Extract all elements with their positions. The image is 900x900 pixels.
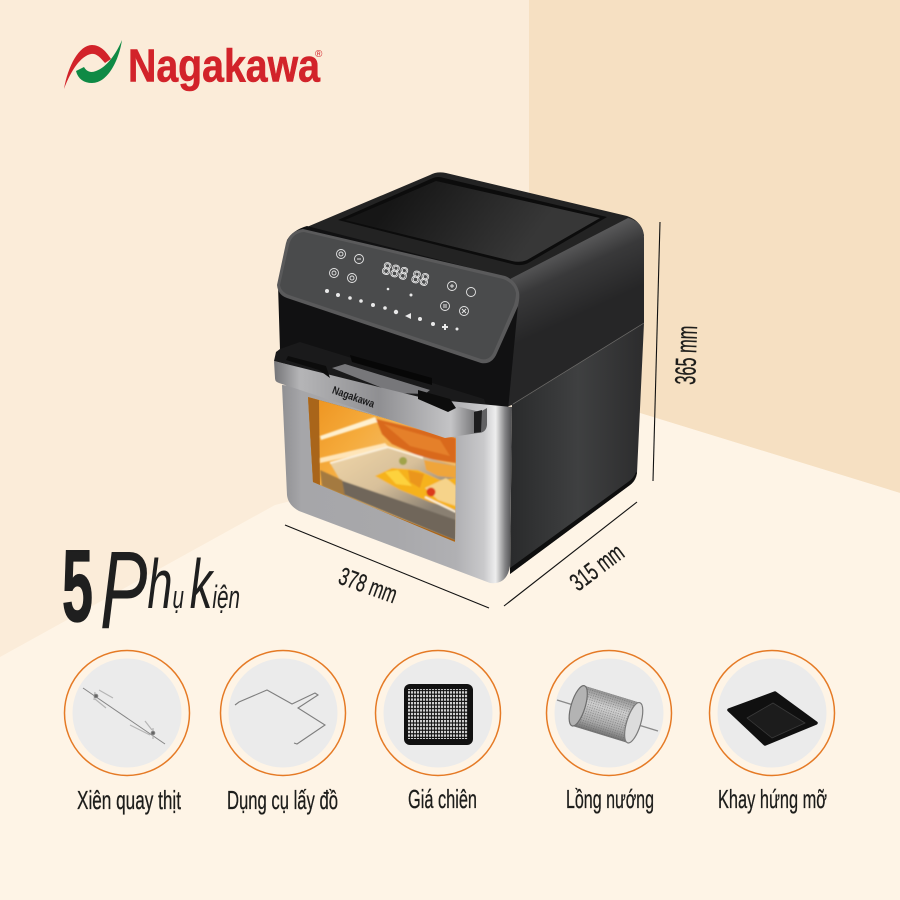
rack light (320, 443, 390, 463)
width line (285, 525, 489, 608)
label: Khay hứng mỡ (718, 784, 827, 814)
tray (729, 693, 816, 744)
accessory: lifting tool (220, 650, 346, 815)
window frame (308, 397, 456, 542)
dimension: height (653, 222, 704, 481)
label: Dụng cụ lấy đồ (227, 785, 338, 815)
food red (426, 488, 436, 496)
accessory: roasting cage (546, 650, 672, 814)
disc (228, 658, 338, 768)
background: floor (0, 413, 900, 900)
ring (376, 650, 500, 776)
pan (330, 447, 456, 525)
pan front wall (342, 480, 456, 540)
bottom edge glow (370, 506, 455, 542)
heading script: h (147, 545, 173, 623)
food main (375, 468, 456, 510)
ring (710, 650, 834, 776)
accessory: frying rack (376, 650, 500, 814)
panel bezel (277, 229, 519, 363)
heading number: 5 (62, 529, 93, 643)
pan rim (330, 447, 423, 463)
seam (513, 323, 644, 404)
ring (546, 650, 672, 776)
food piece 2 (425, 478, 456, 506)
label: Lồng nướng (566, 784, 654, 814)
roast (376, 419, 456, 463)
dimension: depth (504, 502, 637, 606)
icon: logo swoosh red (64, 45, 111, 89)
disc (384, 658, 492, 768)
roast highlight (384, 424, 450, 456)
ring (220, 650, 346, 776)
heading: 5 Phụ kiện (62, 529, 240, 652)
base shadow edge (510, 472, 637, 574)
disc (554, 658, 664, 768)
food piece 3 (385, 470, 412, 486)
product: air fryer oven (274, 172, 644, 583)
depth label: 315 mm (565, 538, 630, 597)
steel handle band (274, 361, 487, 438)
door handle grey plate (332, 364, 430, 394)
rack frame (404, 684, 473, 745)
panel digital display: 888 88 (380, 259, 431, 290)
food piece 4 (408, 470, 424, 488)
panel touch buttons (330, 250, 476, 316)
heading script: ụ kiện (173, 545, 255, 623)
disc (718, 658, 826, 768)
window (308, 397, 456, 542)
top plate (338, 177, 607, 265)
label: Xiên quay thịt (77, 785, 182, 815)
rack mesh (408, 689, 468, 739)
food piece 1 (424, 460, 456, 478)
panel preset icons (325, 288, 458, 330)
disc (72, 658, 182, 768)
top face (295, 172, 644, 290)
door brand text: Nagakawa (330, 385, 377, 411)
heading script: P (100, 529, 147, 652)
side upper body (497, 218, 644, 410)
logo wordmark: Nagakawa (128, 40, 320, 92)
height label: 365 mm (670, 325, 704, 385)
steel door body (282, 385, 512, 583)
label: Giá chiên (408, 784, 477, 814)
control panel (277, 229, 519, 363)
accessory: rotisserie skewer (64, 650, 190, 815)
side lower body (510, 323, 644, 574)
upper rack (320, 417, 378, 440)
door handle recess (350, 355, 432, 385)
right grip (418, 390, 456, 412)
wire tool (235, 690, 325, 744)
accessory: drip tray (710, 650, 834, 814)
food white edge (425, 497, 456, 512)
window side strip (308, 397, 320, 488)
height line (653, 222, 660, 481)
cage cylinder (565, 684, 647, 745)
width label: 378 mm (335, 562, 401, 609)
door lip (274, 342, 487, 416)
axle (557, 700, 658, 731)
food green (399, 457, 407, 465)
dimension: width (285, 525, 489, 609)
background: right wall (529, 0, 900, 493)
logo registered mark: ® (315, 49, 323, 60)
left grip (286, 356, 330, 378)
oven glow (308, 397, 456, 542)
dark lower left window (320, 470, 345, 496)
panel face (280, 232, 516, 359)
icon: logo swoosh green (76, 40, 122, 83)
skewer (83, 688, 165, 744)
front upper body (278, 226, 518, 412)
depth line (504, 502, 637, 606)
ring (64, 650, 190, 776)
logo: Nagakawa (64, 40, 323, 92)
handle end cap (474, 410, 482, 433)
top plate inner (345, 181, 600, 262)
tray inner (747, 703, 805, 738)
